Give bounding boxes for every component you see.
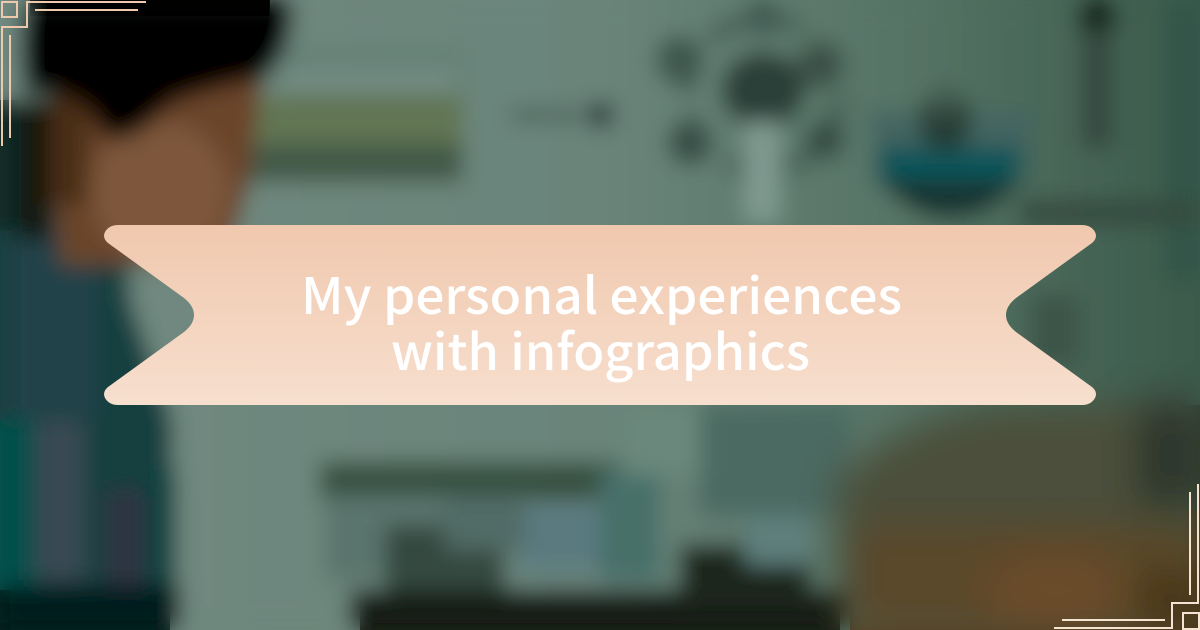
title — [301, 257, 902, 385]
wall poster — [250, 48, 614, 182]
brown foreground object — [835, 405, 1200, 630]
corner frame: top left — [2, 2, 146, 146]
ribbon banner — [104, 225, 1096, 405]
corner frame: bottom right — [1054, 484, 1199, 629]
wall marker — [1077, 0, 1117, 148]
title: My personal experiences — [301, 257, 902, 329]
title: with infographics — [391, 313, 810, 385]
wall bowl — [868, 85, 1036, 218]
person torso — [0, 100, 180, 630]
right wall shadow — [1165, 0, 1200, 280]
person neck and face — [18, 60, 265, 265]
wall diagram — [656, 0, 845, 222]
desk objects — [320, 405, 850, 630]
person hair — [21, 0, 292, 139]
